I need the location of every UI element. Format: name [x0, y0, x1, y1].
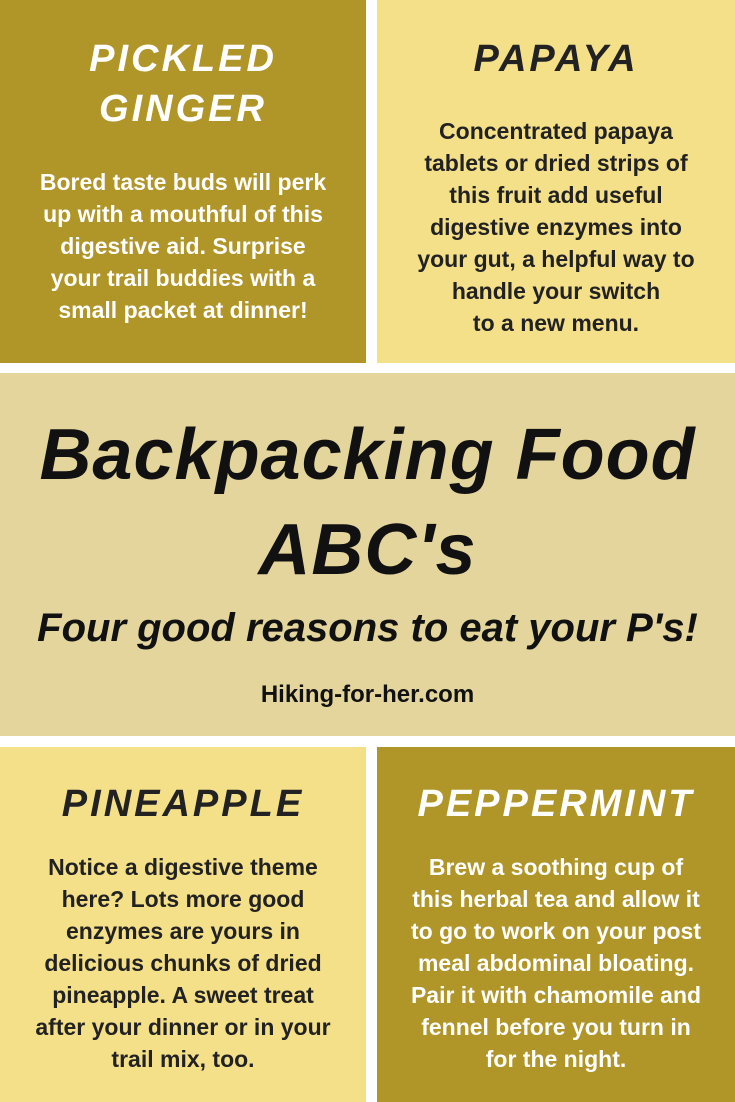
heading: pickled ginger: [89, 38, 277, 130]
website: Hiking-for-her.com: [261, 681, 474, 708]
panel: pineapple: [0, 747, 366, 1102]
text: pickled ginger: digestive aid. Surprise: [60, 233, 306, 259]
panel: pickled ginger: [0, 0, 366, 363]
text: peppermint: to go to work on your post: [411, 918, 701, 944]
text: peppermint: for the night.: [486, 1046, 626, 1072]
text: pineapple: pineapple. A sweet treat: [52, 982, 314, 1008]
panel: papaya: [377, 0, 735, 363]
heading: peppermint: PEPPERMINT: [417, 783, 695, 825]
text: peppermint: Pair it with chamomile and: [411, 982, 701, 1008]
text: papaya: tablets or dried strips of: [424, 150, 688, 176]
text: peppermint: fennel before you turn in: [421, 1014, 691, 1040]
title: [39, 415, 696, 590]
text: pickled ginger: your trail buddies with a: [51, 265, 315, 291]
text: papaya: digestive enzymes into: [430, 214, 682, 240]
text: pineapple: delicious chunks of dried: [44, 950, 322, 976]
text: papaya: Concentrated papaya: [439, 118, 673, 144]
text: pickled ginger: small packet at dinner!: [58, 297, 308, 323]
text: papaya: handle your switch: [452, 278, 660, 304]
text: pickled ginger: Bored taste buds will perk: [40, 169, 326, 195]
heading: pickled ginger: GINGER: [99, 88, 267, 130]
text: papaya: this fruit add useful: [449, 182, 663, 208]
text: pineapple: enzymes are yours in: [66, 918, 300, 944]
text: peppermint: [411, 854, 701, 1072]
title: ABC's: [258, 510, 477, 590]
panel: title band: [0, 373, 735, 736]
text: peppermint: Brew a soothing cup of: [429, 854, 683, 880]
text: pineapple: Notice a digestive theme: [48, 854, 318, 880]
text: pickled ginger: [40, 169, 326, 323]
heading: papaya: PAPAYA: [473, 38, 639, 80]
text: pineapple: here? Lots more good: [62, 886, 304, 912]
text: papaya: to a new menu.: [473, 310, 639, 336]
text: pickled ginger: up with a mouthful of this: [43, 201, 323, 227]
heading: pickled ginger: PICKLED: [89, 38, 277, 80]
panel: peppermint: [377, 747, 735, 1102]
subtitle: Four good reasons to eat your P's!: [37, 606, 698, 650]
heading: pineapple: PINEAPPLE: [62, 783, 304, 825]
title: Backpacking Food: [39, 415, 696, 495]
text: pineapple: after your dinner or in your: [35, 1014, 331, 1040]
text: papaya: your gut, a helpful way to: [417, 246, 695, 272]
text: pineapple: [35, 854, 331, 1072]
text: peppermint: meal abdominal bloating.: [418, 950, 694, 976]
text: papaya: [417, 118, 695, 336]
text: peppermint: this herbal tea and allow it: [412, 886, 700, 912]
text: pineapple: trail mix, too.: [111, 1046, 255, 1072]
